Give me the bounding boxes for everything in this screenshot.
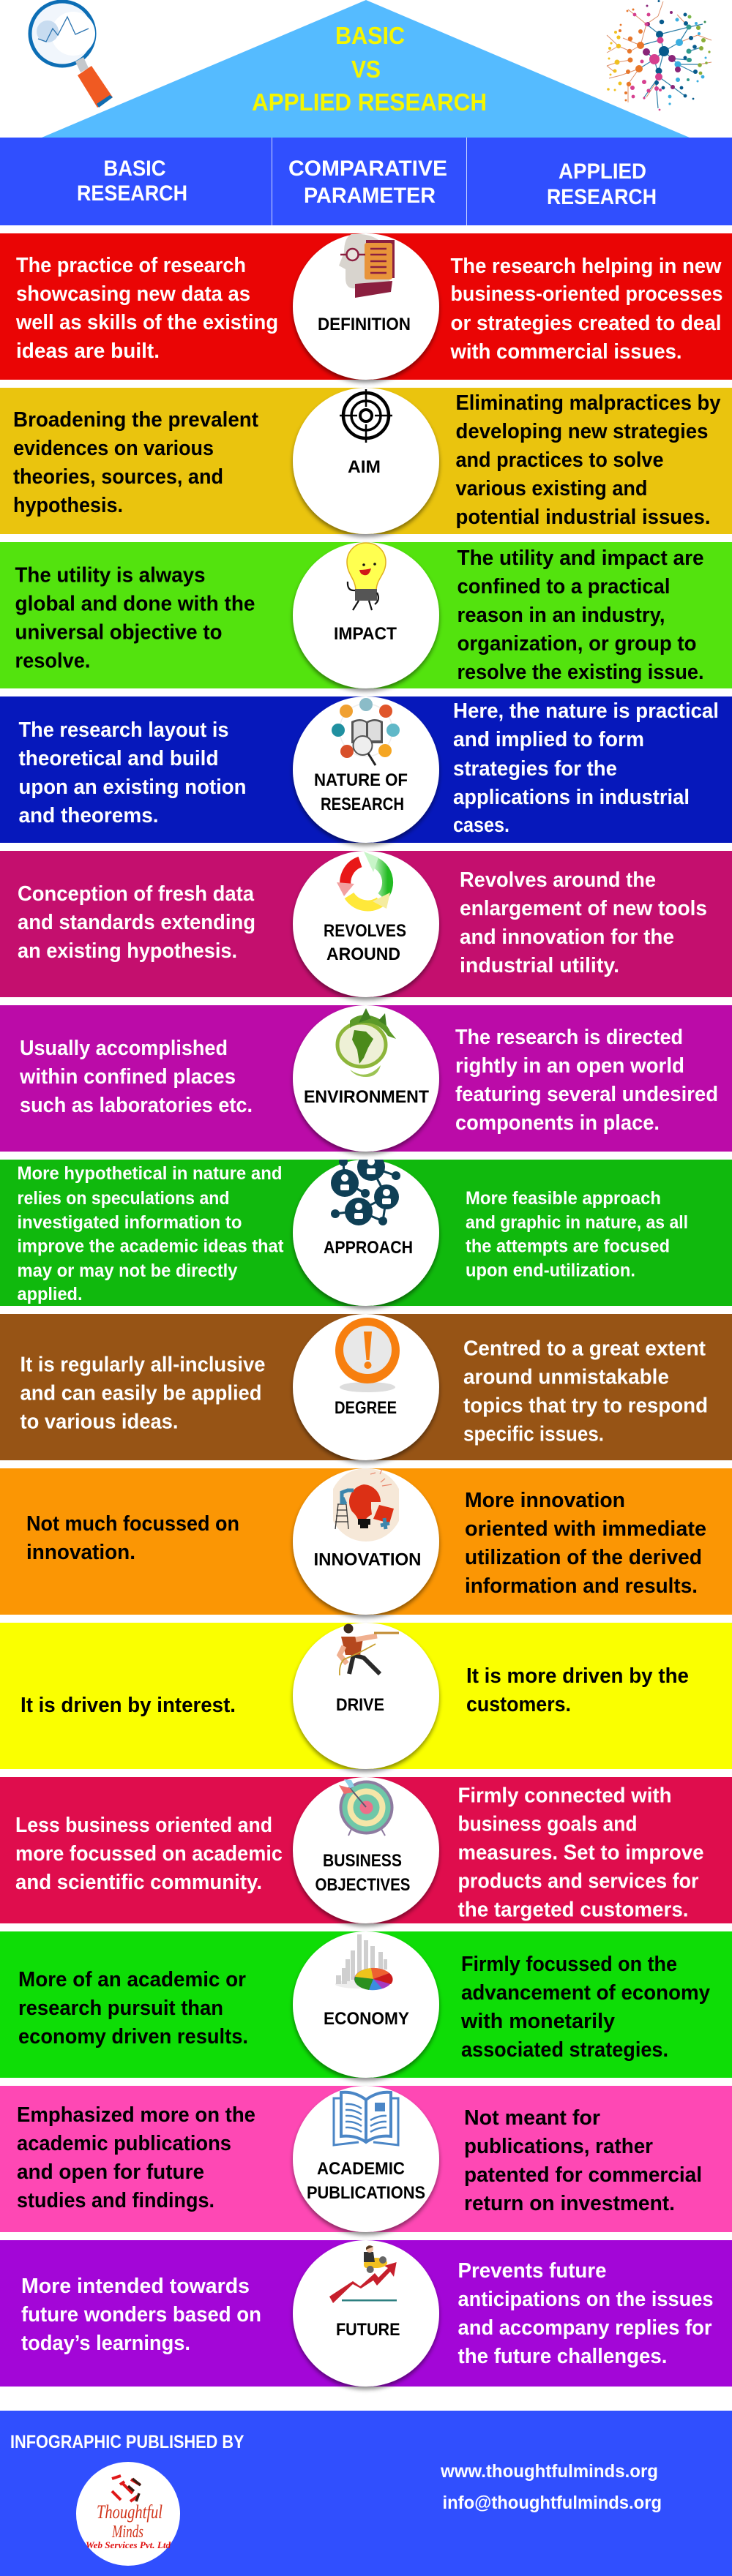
text: basic definition: ideas are built. [16,339,160,363]
row: innovation [0,1468,732,1615]
text: applied definition [450,255,723,364]
label: definition: DEFINITION [318,315,411,334]
text: basic degree: to various ideas. [20,1411,179,1434]
text: basic approach: investigated information to [18,1212,242,1233]
text: basic approach: may or may not be directly [18,1261,238,1281]
text: applied revolves around: enlargement of new tools [460,897,707,920]
text: applied impact: The utility and impact are [457,547,704,570]
text: applied degree: Centred to a great extent [463,1337,706,1361]
text: basic nature: The research layout is [19,718,228,742]
text: basic aim: Broadening the prevalent [13,408,258,432]
text: basic impact: resolve. [15,650,91,673]
icon: arrow in target [339,1779,394,1836]
text: applied future: the future challenges. [458,2345,668,2368]
text: applied future: and accompany replies for [458,2316,712,2340]
label: innovation: INNOVATION [313,1550,422,1570]
text: applied drive [466,1664,689,1716]
text: basic future: future wonders based on [21,2303,261,2327]
text: basic approach: improve the academic ideas that [18,1236,284,1257]
label: degree: DEGREE [335,1398,397,1418]
heading: comparative parameter [288,157,447,208]
text: basic academic publications [17,2103,255,2212]
icon: network of dots [607,0,712,110]
title [252,22,487,116]
text: basic business objectives: more focussed on academic [15,1842,283,1866]
text: basic environment: such as laboratories etc. [20,1094,253,1117]
text: applied nature: and implied to form [453,728,644,751]
text: basic economy: More of an academic or [18,1968,246,1991]
icon: bar chart and pie [335,1934,393,1990]
heading: applied research [547,159,657,209]
text: applied impact: organization, or group to [457,632,697,656]
label: academic publications: PUBLICATIONS [307,2183,425,2203]
icon: puzzle light bulb [329,1468,403,1542]
text: applied academic publications: patented for commercial [464,2163,702,2187]
label: future: FUTURE [336,2320,400,2340]
text: applied definition: with commercial issues. [450,340,682,364]
heading: applied research: RESEARCH [547,185,657,209]
label: aim: AIM [348,457,381,477]
text: basic business objectives [15,1814,283,1894]
row: economy [0,1931,732,2078]
text: applied innovation: utilization of the derived [465,1546,702,1569]
text: applied business objectives: products and services for [458,1870,698,1893]
logo: thoughtful minds: Web Services Pvt. Ltd [86,2539,171,2550]
contact: website: www.thoughtfulminds.org [440,2461,658,2482]
text: applied economy [460,1953,710,2062]
text: applied future: Prevents future [458,2259,606,2283]
text: basic degree [20,1353,265,1434]
icon: book with orbiting circles [332,698,400,765]
row: definition [0,233,732,380]
text: basic aim: evidences on various [13,437,214,460]
text: basic drive: It is driven by interest. [20,1694,236,1717]
heading: applied research: APPLIED [559,159,646,184]
text: basic revolves around [18,882,255,963]
row: future [0,2240,732,2387]
row: nature of research [0,696,732,843]
heading: basic research [77,157,187,206]
text: basic economy: economy driven results. [18,2025,248,2049]
heading: basic research: BASIC [104,157,165,181]
text: applied approach [466,1188,688,1280]
icon: cartoon light bulb [347,543,386,610]
text: basic nature [19,718,246,827]
label: impact: IMPACT [334,624,397,644]
text: applied economy: Firmly focussed on the [461,1953,677,1976]
text: applied definition: The research helping in new [451,255,722,278]
text: applied economy: advancement of economy [461,1981,710,2005]
text: basic innovation [26,1512,239,1564]
text: basic impact [15,563,255,673]
text: applied definition: or strategies created to deal [451,312,722,335]
row: drive [0,1623,732,1769]
text: applied degree: topics that try to respond [463,1394,708,1418]
icon: warning exclamation [335,1318,400,1392]
text: applied aim: developing new strategies [455,420,709,443]
text: basic degree: and can easily be applied [20,1381,262,1405]
text: basic environment: Usually accomplished [20,1037,228,1060]
text: basic aim [13,408,258,517]
text: applied degree: specific issues. [463,1422,604,1446]
text: applied impact: reason in an industry, [457,604,665,627]
text: applied academic publications: publications, rather [464,2135,653,2158]
text: applied revolves around [460,868,707,977]
label: environment: ENVIRONMENT [304,1087,429,1107]
label: economy: ECONOMY [324,2009,409,2029]
text: basic approach: relies on speculations and [18,1188,230,1209]
row: aim [0,388,732,534]
icon: man pulling rope with telescope [340,1624,399,1675]
text: applied approach: upon end-utilization. [466,1260,635,1280]
text: basic impact: global and done with the [15,593,255,616]
text: basic academic publications: studies and findings. [17,2189,214,2212]
text: applied degree: around unmistakable [463,1365,669,1389]
text: applied business objectives: business goals and [458,1813,637,1836]
text: applied business objectives [458,1784,704,1921]
icon: green globe [337,1008,396,1077]
text: applied business objectives: the targeted customers. [458,1898,688,1921]
contact: email: info@thoughtfulminds.org [442,2493,662,2513]
text: basic environment: within confined places [19,1065,236,1089]
text: applied innovation: More innovation [465,1489,625,1512]
text: basic definition: well as skills of the existing [15,311,278,334]
row: business objectives [0,1777,732,1923]
text: basic approach: applied. [18,1284,82,1304]
text: basic economy: research pursuit than [18,1997,223,2020]
row: impact [0,542,732,688]
text: applied innovation [465,1489,706,1598]
text: applied future [458,2259,713,2368]
text: applied business objectives: Firmly connected with [458,1784,672,1807]
text: basic degree: It is regularly all-inclusive [20,1353,265,1377]
title: VS [351,56,381,83]
footer [0,2411,732,2576]
label: nature of research [314,770,408,814]
text: applied environment [455,1026,718,1135]
heading: comparative parameter: PARAMETER [304,184,436,208]
icon: crosshair target [340,389,392,443]
text: applied aim: potential industrial issues. [455,506,710,529]
text: basic academic publications: academic publications [17,2132,231,2155]
label: revolves around: REVOLVES [324,921,406,941]
text: applied revolves around: Revolves around the [460,868,656,892]
text: applied revolves around: industrial utility. [460,954,619,977]
text: applied future: anticipations on the issues [458,2288,713,2311]
label: business objectives: BUSINESS [323,1851,402,1871]
text: basic nature: theoretical and build [19,747,218,770]
text: applied revolves around: and innovation for the [460,925,674,949]
text: basic impact: universal objective to [15,620,223,644]
text: applied innovation: information and results. [465,1574,698,1598]
text: applied nature: applications in industrial [453,786,690,809]
text: applied aim: Eliminating malpractices by [455,391,721,415]
text: applied impact: resolve the existing issue. [457,661,704,684]
text: basic future [21,2275,261,2355]
text: basic aim: theories, sources, and [13,465,223,489]
text: applied economy: with monetarily [460,2010,615,2033]
text: basic approach [18,1163,284,1304]
icon: magnifying glass with chart [30,1,113,108]
text: applied nature: cases. [453,814,509,837]
row: approach [0,1153,732,1306]
text: applied approach: More feasible approach [466,1188,661,1209]
text: basic nature: and theorems. [19,804,158,827]
text: basic business objectives: and scientific community. [15,1871,262,1894]
label: approach: APPROACH [324,1238,413,1258]
text: applied academic publications [464,2106,702,2215]
label: academic publications: ACADEMIC [317,2159,405,2179]
text: applied impact [457,547,704,684]
text: applied drive: It is more driven by the [466,1664,689,1688]
label: nature of research: NATURE OF [314,770,408,790]
label: academic publications [307,2159,425,2203]
text: basic impact: The utility is always [15,563,205,587]
text: basic nature: upon an existing notion [19,776,246,799]
label: business objectives [315,1851,410,1895]
text: basic revolves around: an existing hypothesis. [18,939,237,963]
text: basic future: More intended towards [21,2275,250,2298]
text: applied nature: Here, the nature is practical [453,699,719,723]
text: applied aim [455,391,721,529]
text: applied approach: and graphic in nature, as all [466,1212,688,1233]
row: revolves around [0,851,732,997]
text: applied impact: confined to a practical [457,575,671,598]
text: basic aim: hypothesis. [13,494,123,517]
icon: scooter on rising arrow [329,2245,397,2303]
row: environment [0,1005,732,1152]
text: applied environment: components in place. [455,1111,660,1135]
text: applied environment: rightly in an open world [455,1054,684,1078]
text: applied degree [463,1337,708,1446]
text: basic definition: The practice of research [16,254,246,277]
title: APPLIED RESEARCH [252,89,487,116]
banner triangle [42,0,690,138]
row: degree [0,1314,732,1460]
text: applied approach: the attempts are focused [466,1236,670,1257]
text: basic revolves around: Conception of fresh data [18,882,255,906]
logo: thoughtful minds: Thoughtful [97,2501,163,2523]
text: basic definition: showcasing new data as [16,282,250,306]
footer heading: INFOGRAPHIC PUBLISHED BY [10,2432,244,2452]
text: applied environment: featuring several undesired [455,1083,718,1106]
text: basic revolves around: and standards extending [18,911,255,934]
text: basic innovation: innovation. [26,1541,135,1564]
text: basic approach: More hypothetical in nature and [18,1163,283,1184]
column header bar [0,138,732,225]
text: applied economy: associated strategies. [461,2038,668,2062]
top banner [30,0,712,138]
text: basic economy [18,1968,248,2049]
text: applied business objectives: measures. Set to improve [458,1841,704,1864]
text: applied nature [453,699,719,837]
label: revolves around [324,921,406,964]
text: applied aim: various existing and [455,477,647,500]
logo: thoughtful minds [76,2462,180,2566]
text: basic environment [19,1037,253,1117]
icon: open book [334,2092,398,2145]
text: basic future: today’s learnings. [21,2332,190,2355]
text: applied innovation: oriented with immediate [465,1517,706,1541]
text: applied academic publications: Not meant for [464,2106,600,2130]
text: basic innovation: Not much focussed on [26,1512,239,1536]
title: BASIC [335,22,405,49]
icon: head with document [339,234,395,298]
text: applied drive: customers. [466,1693,571,1716]
text: applied aim: and practices to solve [455,448,663,472]
label: revolves around: AROUND [326,945,400,964]
text: applied definition: business-oriented processes [451,282,723,306]
icon: connected people network [331,1153,400,1225]
text: basic definition [15,254,278,363]
label: business objectives: OBJECTIVES [315,1875,410,1895]
row: academic publications [0,2086,732,2232]
text: applied nature: strategies for the [453,757,617,781]
label: nature of research: RESEARCH [321,795,404,814]
text: applied environment: The research is directed [455,1026,683,1049]
logo: thoughtful minds: Minds [111,2523,143,2542]
text: basic academic publications: and open for future [17,2160,204,2184]
text: basic academic publications: Emphasized more on the [17,2103,255,2127]
heading: basic research: RESEARCH [77,181,187,206]
label: drive: DRIVE [336,1695,384,1715]
text: applied academic publications: return on investment. [464,2192,675,2215]
heading: comparative parameter: COMPARATIVE [288,157,447,181]
icon: three cycle arrows [337,852,390,909]
text: basic business objectives: Less business oriented and [15,1814,272,1837]
